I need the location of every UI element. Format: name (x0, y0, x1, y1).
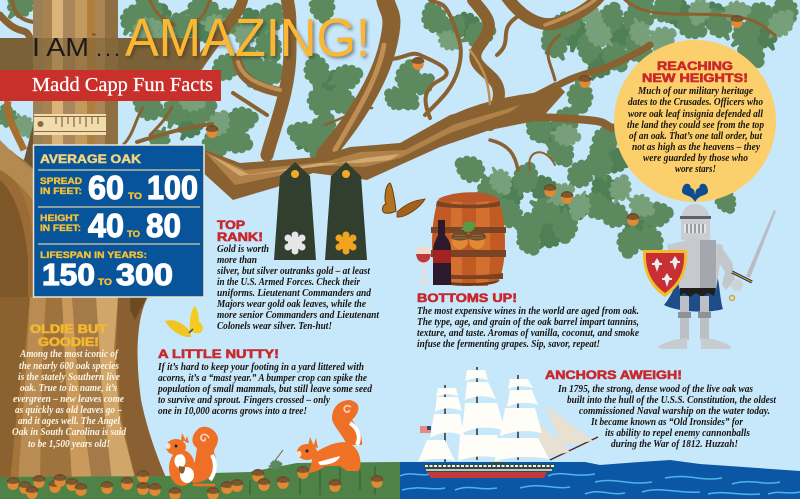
flag (420, 426, 431, 433)
arm (716, 245, 735, 290)
rigging and masts (445, 367, 518, 462)
torso (667, 238, 723, 290)
text: bottoms up: The type, age, and grain of the oak barrel impart tannins, (417, 316, 639, 328)
sky gap left of trunk (0, 101, 33, 160)
main limb (200, 82, 565, 200)
text: top rank: more than (217, 254, 257, 266)
stat: lifespan (40, 250, 173, 292)
callout: reaching new heights: REACHING (657, 59, 733, 73)
text: oldie but goodie: to be 1,500 years old! (28, 438, 110, 450)
icon: right squirrel (296, 400, 362, 473)
stat: height: 40 (88, 207, 124, 244)
ground (0, 450, 400, 499)
stat: spread: 60 (88, 169, 124, 206)
text: top rank (216, 220, 380, 332)
text: top rank: Colonels wear silver. Ten-hut! (217, 320, 332, 332)
text: oldie but goodie: GOODIE! (38, 337, 99, 349)
icon: sailing ship (418, 367, 598, 478)
callout: reaching new heights: NEW HEIGHTS! (642, 71, 748, 85)
stat: height: HEIGHT (40, 213, 80, 223)
heading: average oak: AVERAGE OAK (40, 154, 142, 166)
icon: silver oak leaf (284, 232, 306, 254)
cape (664, 270, 723, 312)
oak leaves behind branches (0, 0, 800, 261)
text: bottoms up: texture, and taste. Aromas of vanilla, coconut, and smoke (417, 327, 639, 339)
icon: butterfly yellow (165, 306, 203, 337)
text: a little nutty: to survive and sprout. Fingers crossed – only (158, 394, 330, 406)
hull (423, 464, 555, 473)
sea (400, 460, 800, 499)
icon: butterfly orange (382, 183, 425, 217)
text: top rank: in the U.S. Armed Forces. Check their (217, 276, 361, 288)
text: anchors aweigh: during the War of 1812. Huzzah! (611, 438, 738, 450)
stat: lifespan: TO (98, 277, 112, 287)
text: oldie but goodie: Among the most iconic of (19, 348, 119, 360)
text: oldie but goodie: is the stately Southern live (18, 371, 120, 383)
text: anchors aweigh: It became known as “Old Ironsides” for (590, 416, 744, 428)
stat: lifespan: 300 (116, 257, 173, 292)
acorns on ground (7, 466, 383, 499)
sails (530, 405, 593, 458)
red banner: Madd Capp Fun Facts (32, 74, 213, 96)
icon: gold oak leaf (336, 232, 356, 254)
callout: reaching new heights: not as high as the heavens – they (632, 141, 760, 153)
sword (746, 210, 776, 278)
wine glass (417, 247, 430, 283)
text: oldie but goodie: Oak in South Carolina is said (12, 426, 126, 438)
title: ... (96, 36, 120, 61)
text: anchors aweigh: In 1795, the strong, dense wood of the live oak was (557, 383, 753, 395)
text: oldie but goodie: and it ages well. The Angel (18, 415, 121, 427)
text: a little nutty: population of small mammals, but still leave some seed (157, 383, 372, 395)
title: I AM (32, 32, 89, 62)
text: bottoms up: BOTTOMS UP! (417, 291, 517, 305)
text: oldie but goodie: OLDIE BUT (30, 324, 107, 336)
text: top rank: silver, but silver outranks gold – at least (216, 265, 371, 277)
text: a little nutty (157, 347, 372, 417)
title: AMAZING! (125, 8, 370, 68)
stat: spread: SPREAD (40, 176, 83, 186)
red banner (0, 70, 221, 101)
text: oldie but goodie: oak. True to its name, it’s (20, 382, 117, 394)
stat: spread (40, 169, 198, 206)
text: top rank: Gold is worth (217, 243, 269, 255)
icon: wine barrel with bottle and glass (416, 192, 506, 286)
icon: epaulettes (274, 162, 367, 260)
shield (643, 250, 687, 297)
text: oldie but goodie: evergreen – new leaves come (13, 393, 124, 405)
title (32, 8, 370, 68)
text: bottoms up: The most expensive wines in the world are aged from oak. (417, 305, 639, 317)
text: top rank: uniforms. Lieutenant Commanders and (217, 287, 371, 299)
stat: spread: 100 (147, 169, 198, 206)
text: a little nutty: one in 10,000 acorns grows into a tree! (158, 405, 307, 417)
text: anchors aweigh: ANCHORS AWEIGH! (545, 368, 682, 382)
acorns on barrel (451, 231, 469, 249)
stat: lifespan: LIFESPAN IN YEARS: (40, 250, 147, 260)
text: bottoms up: infuse the fermenting grapes. Sip, savor, repeat! (417, 338, 600, 350)
text: anchors aweigh: commissioned Naval warship on the water today. (579, 405, 770, 417)
ruler on trunk (34, 114, 106, 135)
callout: reaching new heights: wore oak leaf insignia defended all (628, 108, 764, 120)
callout: reaching new heights: wore stars! (675, 163, 716, 175)
stat: spread: IN FEET: (40, 186, 82, 196)
stat: spread: TO (128, 191, 142, 201)
acorns on tree (206, 15, 743, 226)
text: anchors aweigh (545, 368, 777, 450)
tree branches (0, 0, 775, 170)
stats box: average oak (34, 145, 204, 297)
text: bottoms up (417, 291, 639, 350)
helmet (681, 204, 710, 240)
text: oldie but goodie: the nearly 600 oak species (19, 360, 119, 372)
text: a little nutty: A LITTLE NUTTY! (158, 347, 279, 361)
text: oldie but goodie: as quickly as old leaves go – (15, 404, 122, 416)
text: top rank: TOP (217, 220, 245, 232)
plume (682, 184, 708, 201)
tree trunk (0, 0, 204, 482)
stat: height: IN FEET: (40, 223, 81, 233)
callout: reaching new heights (614, 40, 776, 202)
callout: reaching new heights: were guarded by those who (643, 152, 748, 164)
text: top rank: more senior Commanders and Lieutenant (217, 309, 380, 321)
wine bottle (433, 220, 451, 285)
text: anchors aweigh: its ability to repel enemy cannonballs (605, 427, 750, 439)
text: a little nutty: If it’s hard to keep your footing in a yard littered with (157, 361, 364, 373)
callout: reaching new heights: dates to the Crusades. Officers who (628, 96, 763, 108)
stat: height (40, 207, 181, 244)
sprig (268, 450, 283, 470)
text: a little nutty: acorns, it’s a “mast year.” A bumper crop can spike the (158, 372, 367, 384)
text: top rank: Majors wear gold oak leaves, while the (216, 298, 366, 310)
text: oldie but goodie (12, 324, 126, 450)
left side branch and leaves (0, 101, 40, 200)
callout: reaching new heights: Much of our military heritage (637, 85, 753, 97)
icon: left squirrel (166, 427, 218, 486)
title: ™ (91, 33, 96, 39)
icon: knight (643, 184, 776, 349)
callout: reaching new heights: of an oak. That’s one tall order, but (629, 130, 763, 142)
text: top rank: RANK! (217, 232, 263, 244)
stat: height: TO (127, 229, 140, 239)
legs (680, 296, 709, 340)
stat: lifespan: 150 (42, 257, 95, 292)
callout: reaching new heights: the land they could see from the top (627, 119, 764, 131)
stat: height: 80 (146, 207, 181, 244)
